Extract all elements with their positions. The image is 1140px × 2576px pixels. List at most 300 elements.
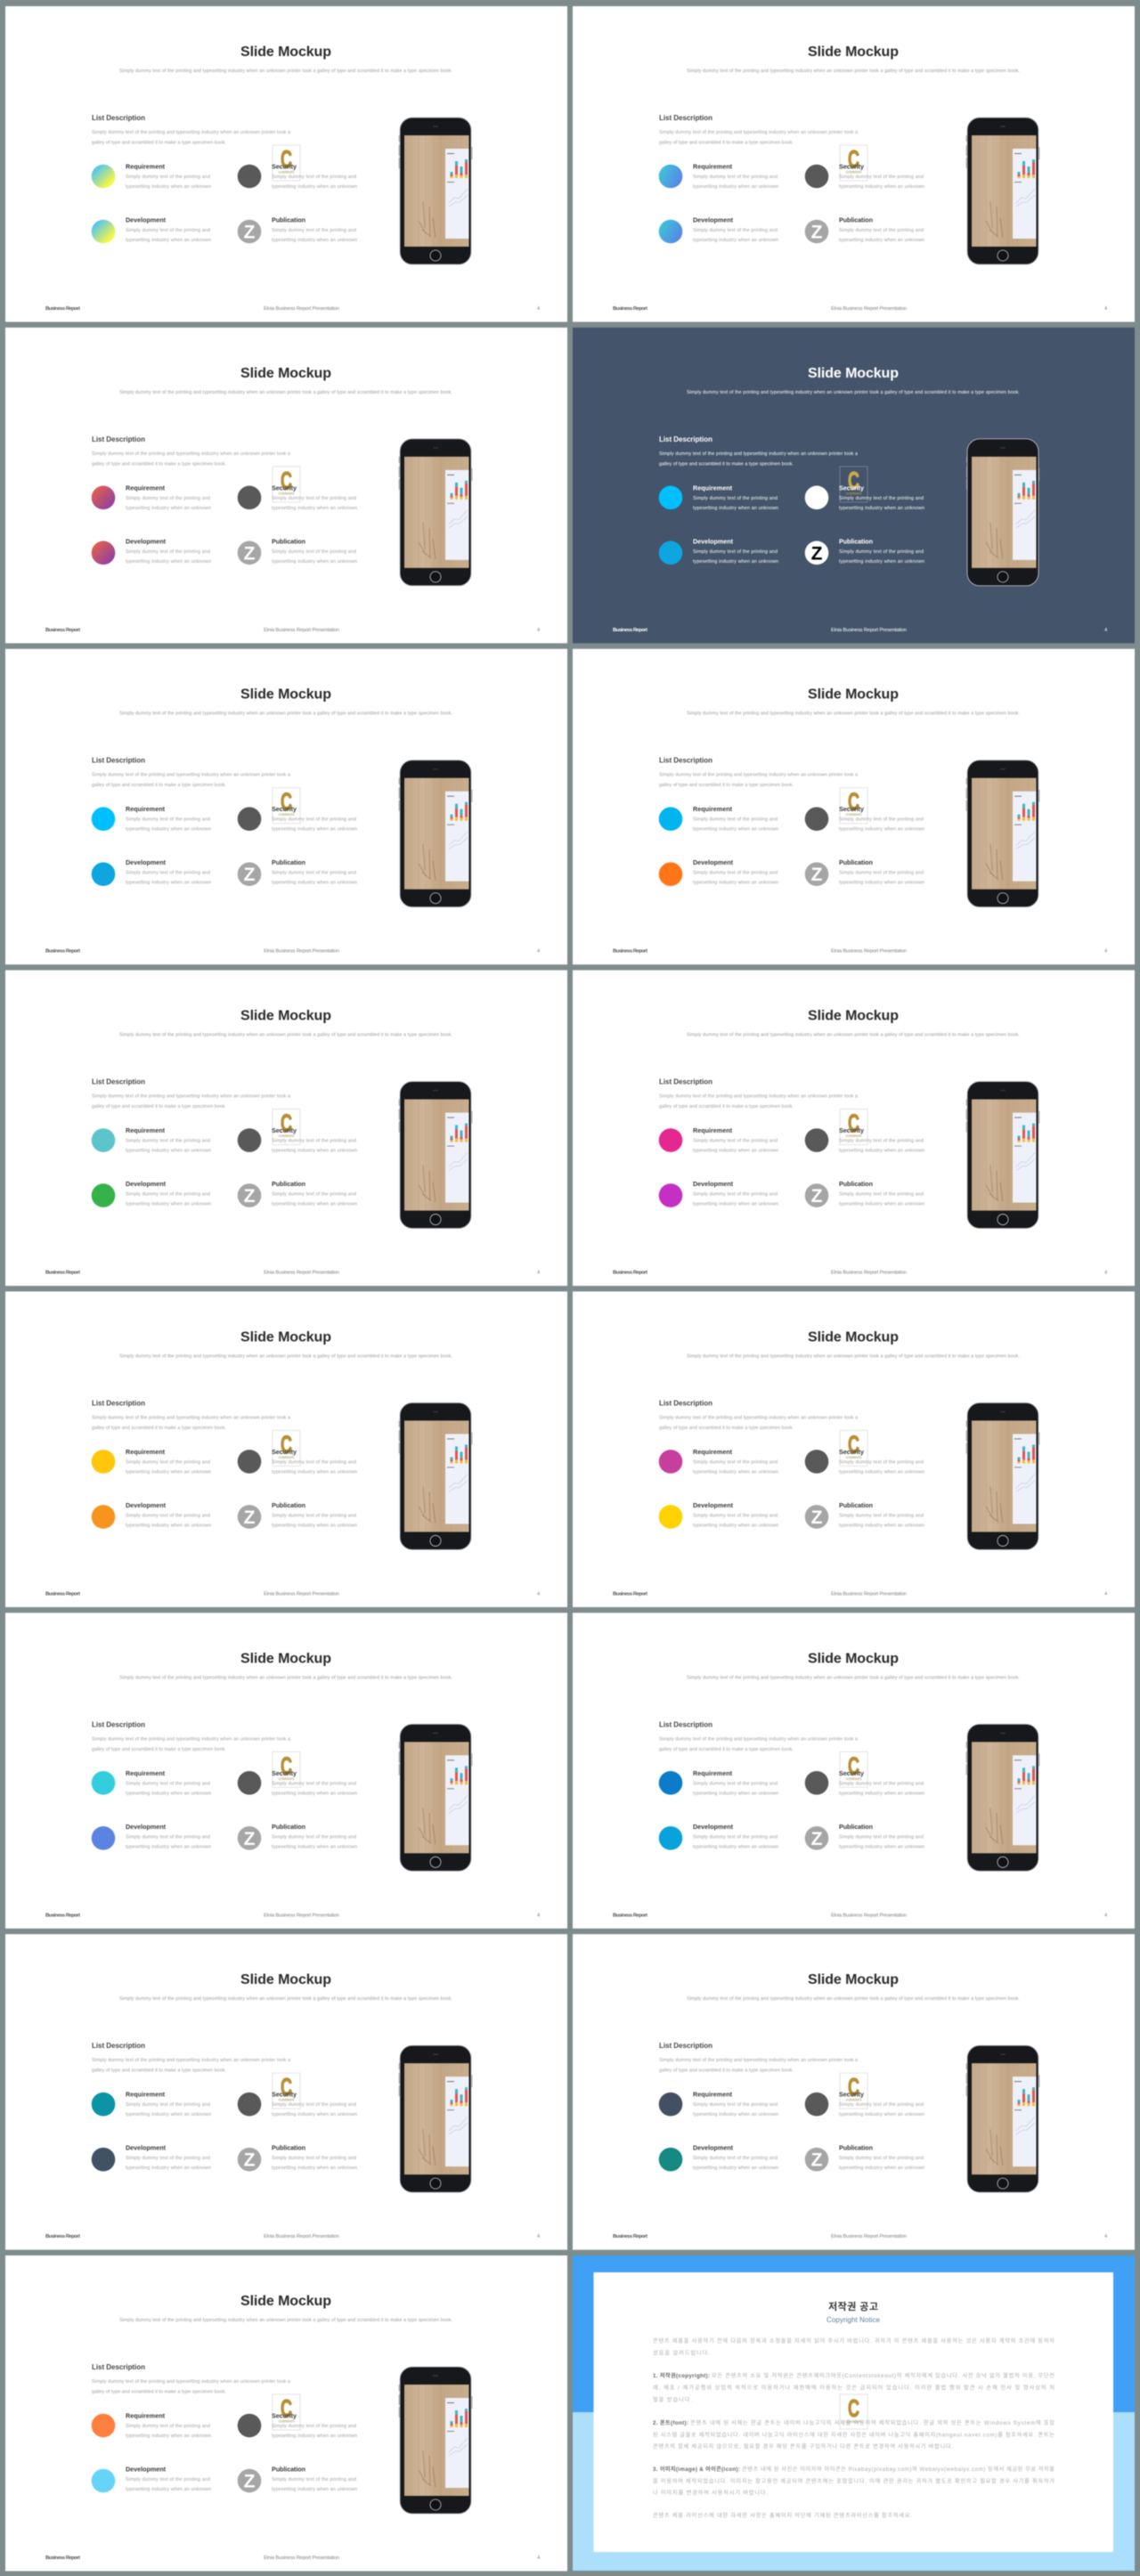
icon: publication Z circle <box>238 1826 261 1850</box>
icon: publication Z circle <box>805 1183 828 1207</box>
icon: publication Z circle: Z <box>244 1186 256 1207</box>
text: section 2 font: 콘텐츠 내에 된 서체는 한글 폰트는 네이버 나눔고딕의 서체를 이용하여 제작되었습니다. 한글 외의 보든 폰트는 Windows System에 포함 <box>690 2419 1054 2426</box>
block: security: typesetting industry when an unknown <box>839 1791 924 1796</box>
text: section 3 image and icon: 나 이미지를 변경하여 사용하시기 바랍니다. <box>653 2490 768 2497</box>
block: development: typesetting industry when an unknown <box>126 2166 211 2171</box>
footer: 4 <box>1104 2234 1108 2239</box>
icon: C logo stamp: CONTENTS <box>846 169 862 175</box>
description line 2: galley of type and scrambled it to make a type specimen book. <box>92 2068 226 2074</box>
footer: Elnia Business Report Presentation <box>264 1913 339 1918</box>
icon: requirement circle <box>92 2092 115 2116</box>
block: requirement: Requirement <box>693 805 733 813</box>
icon: C logo stamp: CONTENTS <box>846 491 862 495</box>
block: security <box>839 1126 924 1154</box>
footer: Elnia Business Report Presentation <box>264 306 339 312</box>
footer: 4 <box>537 1913 541 1918</box>
block: security: Security <box>272 1448 297 1456</box>
icon: publication Z circle <box>805 1826 828 1850</box>
text: section 3 image and icon <box>653 2466 1054 2497</box>
block: security <box>839 162 924 190</box>
icon: C logo stamp <box>840 2073 867 2109</box>
block: publication <box>839 2144 924 2171</box>
description line 2: galley of type and scrambled it to make a type specimen book. <box>92 141 226 146</box>
block: security: typesetting industry when an unknown <box>839 827 924 833</box>
block: requirement: Simply dummy text of the printing and <box>126 817 210 823</box>
slide 8: pink and purple circles <box>573 971 1135 1286</box>
title: Slide Mockup <box>240 1009 331 1024</box>
block: security: typesetting industry when an unknown <box>272 827 357 833</box>
block: publication: typesetting industry when an unknown <box>272 881 357 886</box>
block: requirement <box>126 484 211 511</box>
slide 5: sky blue circles <box>5 649 567 964</box>
block: publication: typesetting industry when an unknown <box>272 1202 357 1207</box>
block: publication: Simply dummy text of the printing and <box>839 1192 924 1198</box>
footer <box>45 628 541 633</box>
title: Slide Mockup <box>808 1329 899 1345</box>
phone mockup <box>399 2367 472 2514</box>
block: development: Simply dummy text of the printing and <box>126 1513 210 1518</box>
phone mockup <box>966 1402 1039 1549</box>
text: section 1 copyright: 재, 배포 / 재가공행위 상업적 목적으로 이용하거나 재판매에 이용하는 것은 금지되어 있습니다. 이러한 불법 행위 발견 시 손해 민사 및 형사상의 처 <box>653 2385 1054 2392</box>
heading: list description: List Description <box>659 1720 712 1728</box>
icon: security circle <box>805 1450 828 1474</box>
icon: development circle <box>659 1826 682 1850</box>
block: development: Development <box>693 1180 734 1188</box>
block: requirement <box>126 805 211 833</box>
block: development: Development <box>126 2466 167 2474</box>
block: development: Simply dummy text of the printing and <box>126 549 210 555</box>
heading: list description: List Description <box>659 1399 712 1407</box>
block: requirement: Requirement <box>126 2412 166 2420</box>
block: requirement: typesetting industry when an unknown <box>693 1791 778 1796</box>
block: publication: typesetting industry when an unknown <box>839 238 924 243</box>
slide 1: cyan-yellow gradient <box>5 6 567 322</box>
block: security: Simply dummy text of the printing and <box>839 2102 924 2108</box>
heading: list description: List Description <box>659 435 712 443</box>
title: Slide Mockup <box>240 2294 331 2309</box>
title: Slide Mockup <box>808 366 899 381</box>
icon: security circle <box>805 486 828 509</box>
block: development <box>126 537 211 565</box>
icon: C logo stamp: CONTENTS <box>846 812 862 817</box>
block: security <box>272 1448 357 1475</box>
block: development <box>693 2144 778 2171</box>
heading: list description: List Description <box>92 757 145 765</box>
block: requirement: typesetting industry when an unknown <box>126 184 211 190</box>
phone mockup <box>399 439 472 586</box>
footer: Business Report <box>45 2556 80 2561</box>
footer: 4 <box>1104 1913 1108 1918</box>
block: publication: typesetting industry when an unknown <box>272 1844 357 1849</box>
block: security: typesetting industry when an unknown <box>272 184 357 190</box>
phone mockup <box>966 2045 1039 2192</box>
block: requirement: Simply dummy text of the printing and <box>126 1139 210 1144</box>
icon: publication Z circle <box>238 862 261 886</box>
block: requirement <box>693 1769 778 1796</box>
block: publication: Publication <box>272 215 305 224</box>
block: development: typesetting industry when an unknown <box>126 1844 211 1849</box>
icon: C logo stamp: C <box>281 2394 292 2422</box>
description line 2: galley of type and scrambled it to make a type specimen book. <box>92 1104 226 1109</box>
icon: security circle <box>238 1128 261 1152</box>
icon: publication Z circle: Z <box>811 1507 823 1528</box>
block: requirement: Simply dummy text of the printing and <box>126 496 210 501</box>
block: publication: typesetting industry when an unknown <box>839 881 924 886</box>
block: publication: Simply dummy text of the printing and <box>272 871 356 876</box>
description line 2: galley of type and scrambled it to make a type specimen book. <box>659 141 794 146</box>
footer <box>45 1913 541 1918</box>
icon: security circle <box>805 1128 828 1152</box>
block: security: Simply dummy text of the printing and <box>272 817 356 823</box>
block: publication: Publication <box>839 215 873 224</box>
block: development <box>126 215 211 243</box>
icon: publication Z circle: Z <box>244 865 256 885</box>
block: requirement: Simply dummy text of the printing and <box>693 175 778 180</box>
subtitle: Simply dummy text of the printing and typesetting industry when an unknown printer took a galley of type and scrambled it to make a type specimen book. <box>119 69 452 74</box>
icon: C logo stamp <box>840 2394 867 2429</box>
block: publication: Simply dummy text of the printing and <box>839 2156 924 2161</box>
block: development: Development <box>126 858 167 866</box>
block: development <box>693 537 778 565</box>
footer: 4 <box>537 1591 541 1597</box>
phone mockup <box>399 760 472 907</box>
heading: list description: List Description <box>659 2042 712 2050</box>
block: security <box>272 1126 357 1154</box>
footer: 4 <box>1104 1271 1108 1276</box>
icon: security circle <box>805 165 828 188</box>
description line 1: Simply dummy text of the printing and typesetting industry when an unknown printer took a <box>92 2058 290 2063</box>
block: publication <box>272 537 357 565</box>
footer: Business Report <box>45 1591 80 1597</box>
title: Slide Mockup <box>240 687 331 703</box>
heading: list description: List Description <box>92 2042 145 2050</box>
icon: C logo stamp: C <box>281 145 292 173</box>
block: publication: typesetting industry when an unknown <box>272 1523 357 1528</box>
icon: publication Z circle: Z <box>244 2472 256 2492</box>
block: requirement: Simply dummy text of the printing and <box>693 817 778 823</box>
block: requirement: Requirement <box>126 1126 166 1134</box>
block: requirement: Requirement <box>126 805 166 813</box>
block: requirement: typesetting industry when an unknown <box>693 184 778 190</box>
description line 1: Simply dummy text of the printing and typesetting industry when an unknown printer took a <box>92 451 290 457</box>
slide 2: teal-blue gradient <box>573 6 1135 322</box>
subtitle: Simply dummy text of the printing and typesetting industry when an unknown printer took a galley of type and scrambled it to make a type specimen book. <box>687 69 1020 74</box>
subtitle: Simply dummy text of the printing and typesetting industry when an unknown printer took a galley of type and scrambled it to make a type specimen book. <box>119 1353 452 1359</box>
slide 16: copyright notice <box>573 2255 1135 2571</box>
icon: C logo stamp: C <box>848 1109 859 1137</box>
block: security: typesetting industry when an unknown <box>272 506 357 511</box>
block: publication: typesetting industry when an unknown <box>272 2166 357 2171</box>
icon: development circle <box>659 220 682 243</box>
icon: C logo stamp <box>273 2394 300 2430</box>
icon: development circle <box>659 2148 682 2171</box>
text: section 1 copyright: 벌을 받습니다. <box>653 2396 692 2403</box>
block: security: typesetting industry when an unknown <box>272 1791 357 1796</box>
block: requirement: Simply dummy text of the printing and <box>693 1139 778 1144</box>
phone mockup <box>966 760 1039 907</box>
icon: security circle <box>238 807 261 831</box>
icon: publication Z circle <box>238 2469 261 2492</box>
block: publication: Simply dummy text of the printing and <box>839 871 924 876</box>
block: security: Security <box>272 805 297 813</box>
block: security: typesetting industry when an unknown <box>272 1469 357 1475</box>
block: publication: Publication <box>839 2144 873 2152</box>
block: requirement: Requirement <box>693 1769 733 1777</box>
phone mockup <box>966 118 1039 264</box>
footer: 4 <box>1104 628 1108 633</box>
phone mockup <box>399 1402 472 1549</box>
block: requirement: Simply dummy text of the printing and <box>126 175 210 180</box>
block: publication: Publication <box>839 537 873 545</box>
icon: C logo stamp: C <box>848 145 859 173</box>
footer: Business Report <box>613 306 647 312</box>
block: requirement: Requirement <box>126 2091 166 2099</box>
block: requirement: Requirement <box>693 1448 733 1456</box>
block: requirement: typesetting industry when an unknown <box>693 1469 778 1475</box>
icon: security circle <box>238 486 261 509</box>
block: development: Simply dummy text of the printing and <box>693 2156 778 2161</box>
block: publication <box>272 2466 357 2492</box>
icon: requirement circle <box>92 486 115 509</box>
heading: list description: List Description <box>92 2363 145 2371</box>
heading: list description: List Description <box>659 114 712 122</box>
footer: 4 <box>1104 949 1108 955</box>
icon: publication Z circle <box>805 1505 828 1529</box>
icon: C logo stamp <box>273 788 300 824</box>
block: security: typesetting industry when an unknown <box>272 2112 357 2117</box>
text: section 2 font: 콘텐츠의 함께 제공되지 않으므로, 필요할 경우 해당 폰트를 구입하거나 다른 폰트로 변경하여 사용하시기 바랍니다. <box>653 2443 953 2450</box>
block: publication: typesetting industry when an unknown <box>272 559 357 565</box>
icon: publication Z circle: Z <box>811 223 823 242</box>
block: publication: Simply dummy text of the printing and <box>839 1834 924 1840</box>
block: requirement: typesetting industry when an unknown <box>693 2112 778 2117</box>
block: requirement <box>693 484 778 511</box>
footer: Business Report <box>613 1913 647 1918</box>
block: requirement: Simply dummy text of the printing and <box>126 1459 210 1465</box>
subtitle: Simply dummy text of the printing and typesetting industry when an unknown printer took a galley of type and scrambled it to make a type specimen book. <box>119 2318 452 2323</box>
block: publication: Publication <box>839 1823 873 1831</box>
description line 2: galley of type and scrambled it to make a type specimen book. <box>659 461 794 467</box>
footer <box>613 1913 1108 1918</box>
block: security: Security <box>839 484 864 492</box>
heading: list description: List Description <box>92 114 145 122</box>
slide 11: aqua and periwinkle circles <box>5 1613 567 1929</box>
block: development: typesetting industry when an unknown <box>693 1844 778 1849</box>
block: development: Development <box>693 215 734 224</box>
icon: publication Z circle: Z <box>244 223 256 242</box>
block: security: Security <box>272 1126 297 1134</box>
block: development: Development <box>693 537 734 545</box>
icon: publication Z circle <box>238 1505 261 1529</box>
phone mockup <box>399 2045 472 2192</box>
block: requirement: typesetting industry when an unknown <box>126 2112 211 2117</box>
block: development: typesetting industry when an unknown <box>693 238 778 243</box>
block: requirement <box>126 2412 211 2439</box>
slide 3: red-purple gradient <box>5 328 567 643</box>
block: security <box>839 1448 924 1475</box>
block: security: Security <box>839 2091 864 2099</box>
footer: Elnia Business Report Presentation <box>264 1271 339 1276</box>
title: Slide Mockup <box>240 45 331 60</box>
footer <box>613 949 1108 955</box>
block: development: Development <box>693 1501 734 1509</box>
icon: requirement circle <box>659 486 682 509</box>
icon: security circle <box>805 2092 828 2116</box>
footer: Business Report <box>613 628 647 633</box>
phone mockup <box>966 1082 1039 1229</box>
heading: list description: List Description <box>92 435 145 443</box>
footer: 4 <box>1104 306 1108 312</box>
icon: C logo stamp <box>273 2073 300 2109</box>
description line 1: Simply dummy text of the printing and typesetting industry when an unknown printer took a <box>659 1415 858 1420</box>
icon: C logo stamp: C <box>281 467 292 494</box>
icon: C logo stamp: CONTENTS <box>278 812 295 817</box>
subtitle: Simply dummy text of the printing and typesetting industry when an unknown printer took a galley of type and scrambled it to make a type specimen book. <box>687 1996 1020 2002</box>
block: security: typesetting industry when an unknown <box>839 1149 924 1154</box>
block: development: Simply dummy text of the printing and <box>126 1834 210 1840</box>
block: security: typesetting industry when an unknown <box>272 1149 357 1154</box>
text: section 1 copyright <box>653 2372 1054 2403</box>
block: requirement <box>693 2091 778 2117</box>
icon: C logo stamp: C <box>281 1430 292 1458</box>
icon: C logo stamp: C <box>848 1751 859 1779</box>
block: publication <box>272 2144 357 2171</box>
block: publication <box>272 1823 357 1849</box>
block: publication <box>272 858 357 886</box>
icon: publication Z circle: Z <box>244 543 256 564</box>
block: requirement: typesetting industry when an unknown <box>693 506 778 511</box>
icon: security circle <box>238 2092 261 2116</box>
footer <box>613 306 1108 312</box>
block: publication: typesetting industry when an unknown <box>839 2166 924 2171</box>
block: publication: typesetting industry when an unknown <box>272 238 357 243</box>
block: development: Development <box>693 858 734 866</box>
icon: C logo stamp: C <box>281 788 292 816</box>
icon: C logo stamp: C <box>848 788 859 816</box>
icon: C logo stamp: C <box>848 2073 859 2101</box>
footer: Elnia Business Report Presentation <box>264 2234 339 2239</box>
block: development: Simply dummy text of the printing and <box>693 1513 778 1518</box>
icon: security circle <box>238 1450 261 1474</box>
title: Slide Mockup <box>808 687 899 703</box>
icon: publication Z circle <box>238 2148 261 2171</box>
icon: publication Z circle <box>238 541 261 565</box>
block: requirement: typesetting industry when an unknown <box>126 1791 211 1796</box>
block: security: typesetting industry when an unknown <box>839 2112 924 2117</box>
icon: requirement circle <box>659 1771 682 1795</box>
footer: 4 <box>1104 1591 1108 1597</box>
block: development: Simply dummy text of the printing and <box>126 871 210 876</box>
block: requirement: Requirement <box>126 162 166 171</box>
icon: publication Z circle: Z <box>244 1829 256 1849</box>
icon: C logo stamp: CONTENTS <box>846 2419 862 2424</box>
block: security <box>272 1769 357 1796</box>
block: publication: typesetting industry when an unknown <box>839 1844 924 1849</box>
block: security: Security <box>839 1126 864 1134</box>
block: security: Simply dummy text of the printing and <box>839 1139 924 1144</box>
phone mockup <box>399 1082 472 1229</box>
description line 2: galley of type and scrambled it to make a type specimen book. <box>659 1426 794 1431</box>
block: publication <box>839 215 924 243</box>
block: publication: Simply dummy text of the printing and <box>272 2477 356 2483</box>
block: publication <box>839 1501 924 1528</box>
description line 2: galley of type and scrambled it to make a type specimen book. <box>659 1104 794 1109</box>
subtitle: Simply dummy text of the printing and typesetting industry when an unknown printer took a galley of type and scrambled it to make a type specimen book. <box>119 1675 452 1680</box>
footer: Elnia Business Report Presentation <box>264 628 339 633</box>
block: security: Simply dummy text of the printing and <box>839 175 924 180</box>
heading: notice title: 저작권 공고 <box>828 2300 878 2312</box>
icon: C logo stamp: CONTENTS <box>278 1134 295 1138</box>
icon: C logo stamp <box>840 145 867 181</box>
icon: C logo stamp: C <box>848 1430 859 1458</box>
footer: Business Report <box>45 628 80 633</box>
footer <box>613 2234 1108 2239</box>
text: section 1 copyright: 1. 저작권(copyright): <box>653 2372 710 2379</box>
icon: development circle <box>92 2469 115 2492</box>
footer: 4 <box>537 628 541 633</box>
footer <box>45 2556 541 2561</box>
block: development <box>126 2144 211 2171</box>
icon: security circle <box>238 1771 261 1795</box>
text: section 3 image and icon: 콘텐츠 내에 된 사진은 이미지와 아이콘은 Pixabay(pixabay.com)와 Webalys(webalys.com) 등에서 제공된 무료 저작물 <box>742 2466 1054 2473</box>
block: development: Development <box>126 215 167 224</box>
icon: requirement circle <box>92 1128 115 1152</box>
icon: publication Z circle: Z <box>811 543 823 564</box>
block: development: typesetting industry when an unknown <box>126 881 211 886</box>
block: development: Simply dummy text of the printing and <box>693 1834 778 1840</box>
footer: Elnia Business Report Presentation <box>831 949 907 955</box>
icon: publication Z circle: Z <box>244 2150 256 2171</box>
title: Slide Mockup <box>240 366 331 381</box>
subtitle: Simply dummy text of the printing and typesetting industry when an unknown printer took a galley of type and scrambled it to make a type specimen book. <box>119 711 452 717</box>
title: Slide Mockup <box>240 1972 331 1987</box>
icon: C logo stamp: CONTENTS <box>846 1134 862 1138</box>
block: development <box>126 2466 211 2492</box>
phone mockup <box>399 1724 472 1871</box>
text: section 3 image and icon: 을 이용하여 제작되었습니다. 이미지는 참고용만 제공되며 콘텐츠에는 포함합니다. 이에 관한 권리는 귀하가 별도로 확인하고 필요할 경우 사기를 취득하거 <box>653 2477 1054 2484</box>
description line 2: galley of type and scrambled it to make a type specimen book. <box>659 1747 794 1752</box>
footer: Business Report <box>45 1913 80 1918</box>
block: publication <box>839 537 924 565</box>
subtitle: Simply dummy text of the printing and typesetting industry when an unknown printer took a galley of type and scrambled it to make a type specimen book. <box>687 1675 1020 1680</box>
icon: requirement circle <box>659 807 682 831</box>
footer <box>45 1271 541 1276</box>
footer <box>45 2234 541 2239</box>
block: requirement: typesetting industry when an unknown <box>126 2434 211 2439</box>
block: requirement: Simply dummy text of the printing and <box>126 2424 210 2429</box>
icon: requirement circle <box>92 807 115 831</box>
block: development: Simply dummy text of the printing and <box>693 1192 778 1198</box>
block: publication: Publication <box>839 1180 873 1188</box>
block: development: Development <box>126 2144 167 2152</box>
icon: security circle <box>805 1771 828 1795</box>
icon: development circle <box>92 1505 115 1529</box>
phone mockup <box>399 118 472 264</box>
icon: requirement circle <box>92 2414 115 2437</box>
text: section 2 font: 된 시스템 글꼴로 제작되었습니다. 네이버 나눔고딕 라이선스에 대한 자세한 사항은 네이버 나눔고딕 홈페이지(hangeul.naver.com)를 참조하세요. 폰트는 <box>653 2431 1054 2438</box>
footer: Elnia Business Report Presentation <box>831 628 907 633</box>
icon: C logo stamp <box>840 1430 867 1466</box>
subtitle: Simply dummy text of the printing and typesetting industry when an unknown printer took a galley of type and scrambled it to make a type specimen book. <box>687 390 1020 395</box>
description line 2: galley of type and scrambled it to make a type specimen book. <box>92 2390 226 2395</box>
block: requirement: Requirement <box>693 1126 733 1134</box>
description line 1: Simply dummy text of the printing and typesetting industry when an unknown printer took a <box>92 2379 290 2385</box>
block: requirement <box>126 1126 211 1154</box>
description line 1: Simply dummy text of the printing and typesetting industry when an unknown printer took a <box>659 2058 858 2063</box>
footer: 4 <box>537 306 541 312</box>
block: publication: typesetting industry when an unknown <box>839 1202 924 1207</box>
footer: Business Report <box>45 949 80 955</box>
